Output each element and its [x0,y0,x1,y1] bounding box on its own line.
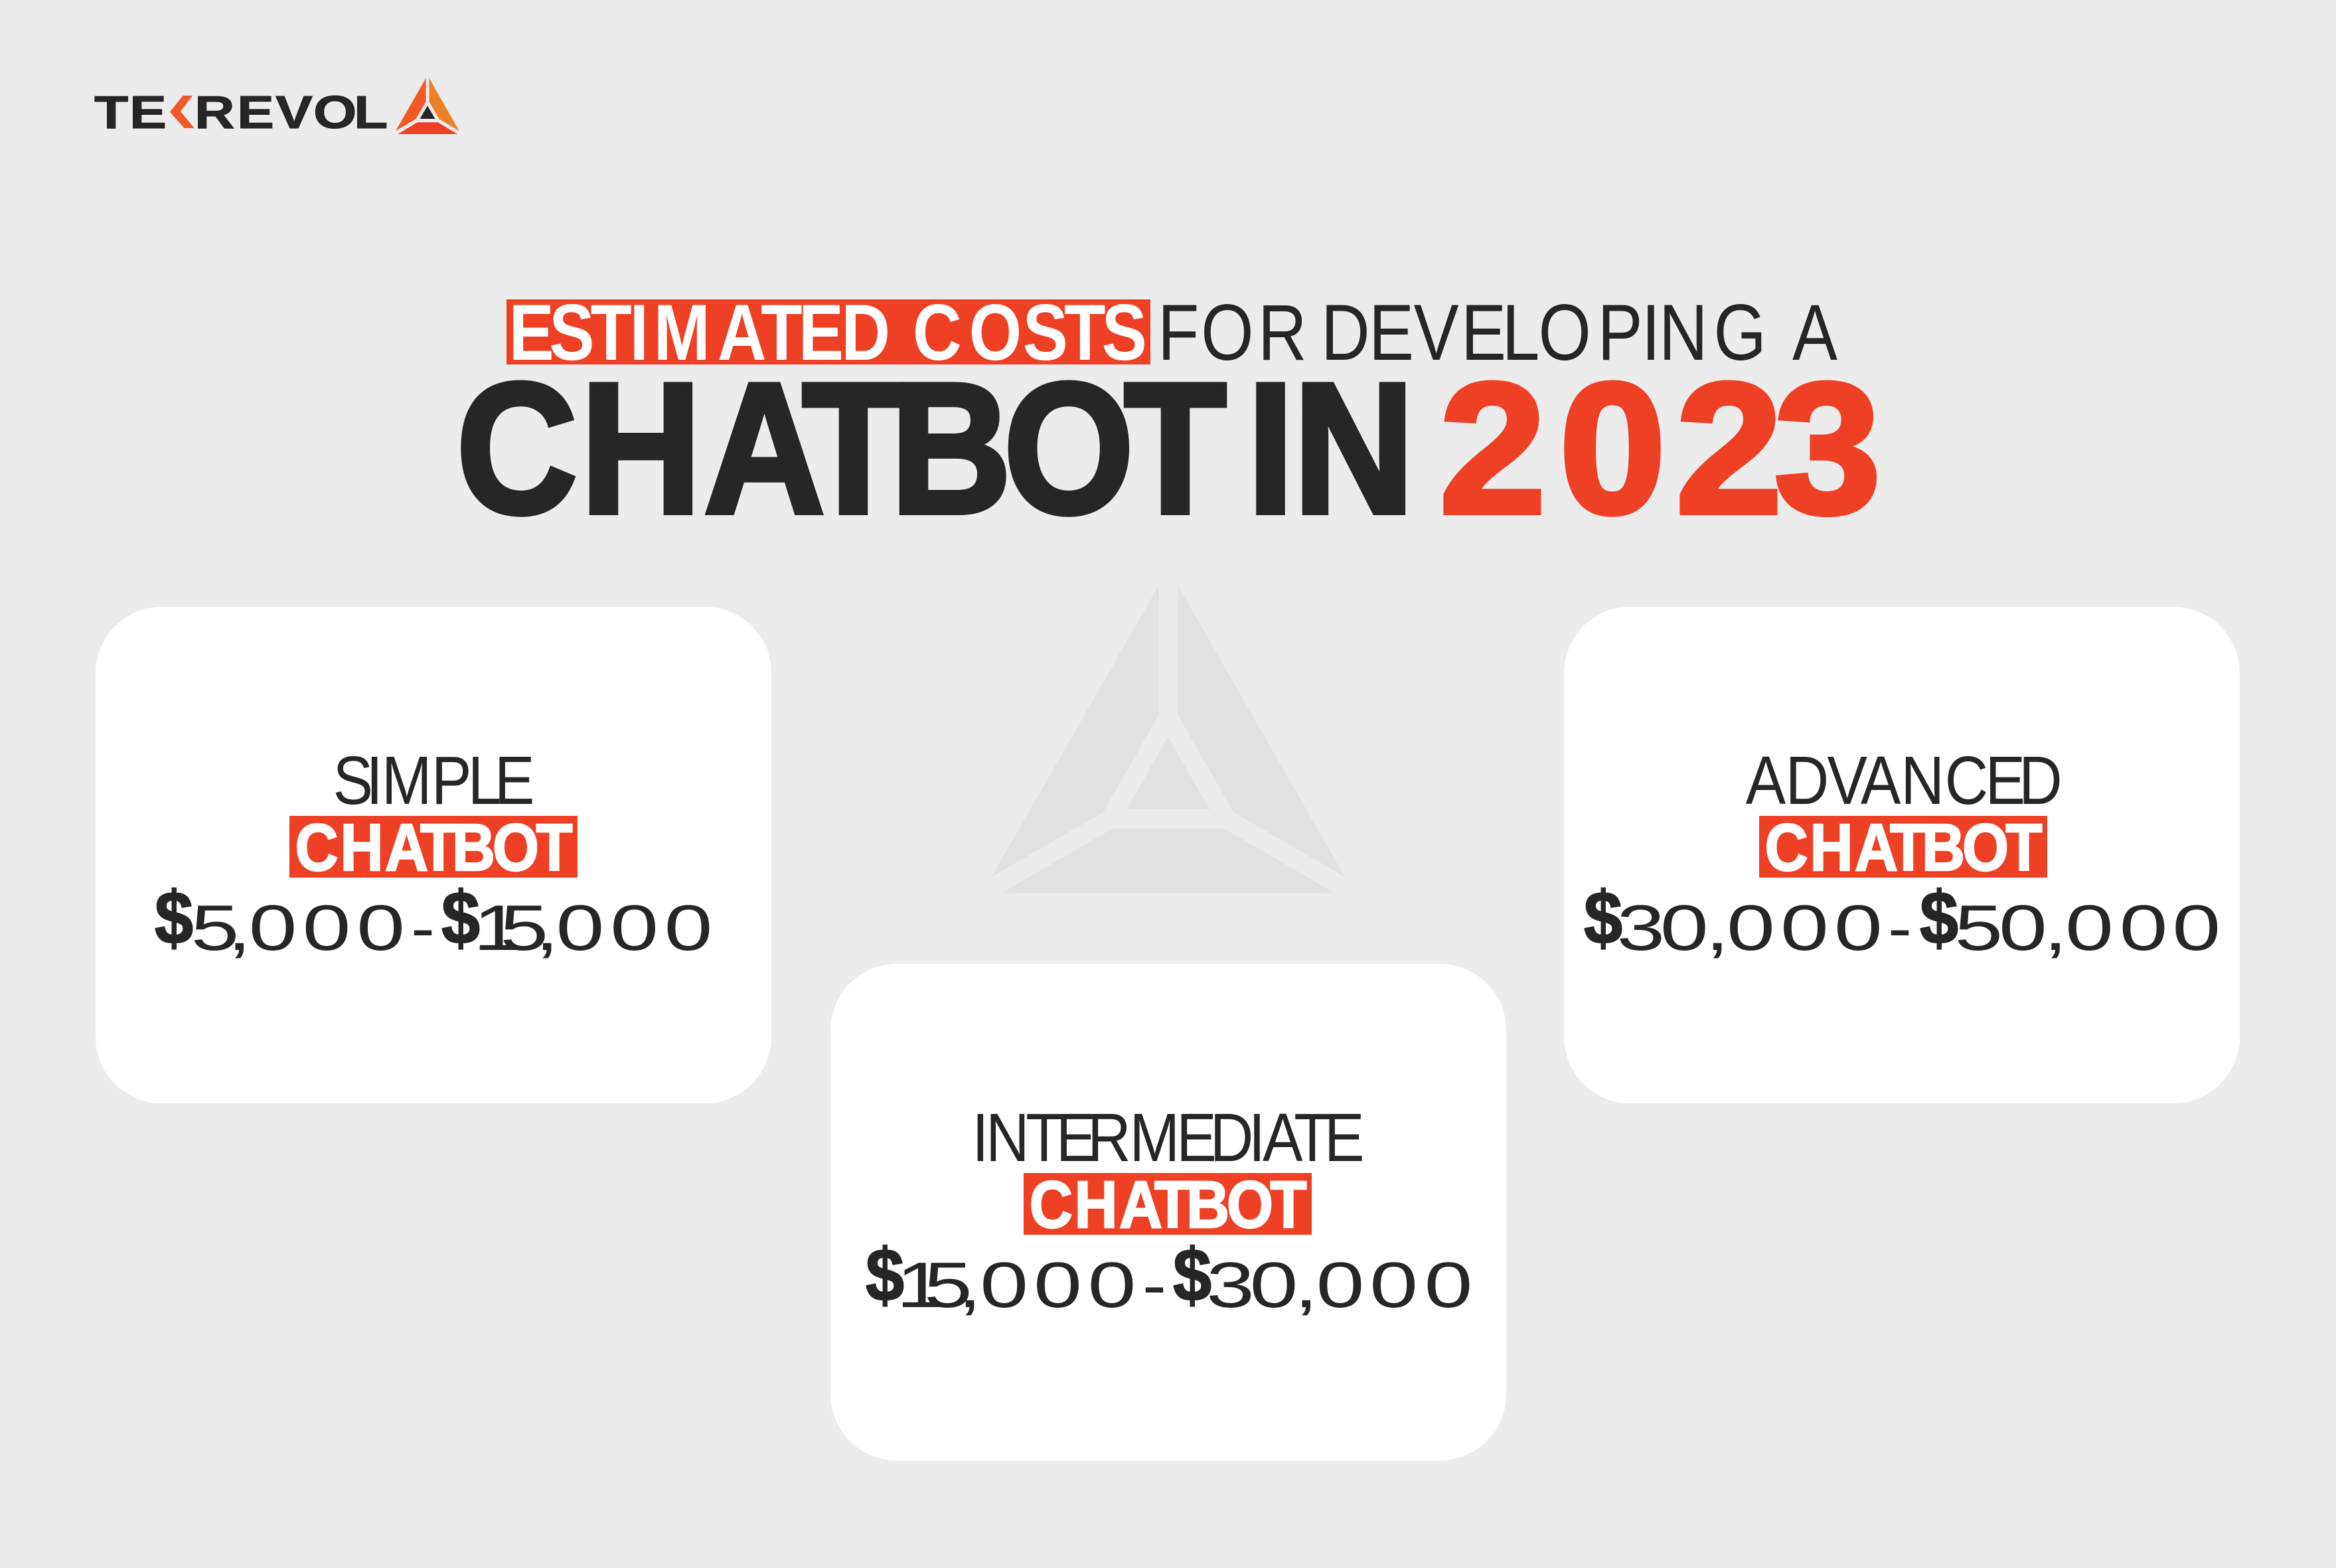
logo wordmark: REVOL [195,87,388,138]
logo triangle mark [396,78,459,134]
price range: - [1888,892,1912,964]
price range [866,1233,1472,1321]
title line two: CHATBOT IN [457,345,1414,552]
price range: 15,000 [473,892,712,964]
price range: - [411,892,435,964]
label: intermediate: INTERMEDIATE [972,1099,1364,1176]
logo wordmark [94,87,388,138]
title highlight: estimated costs: ESTIMATED COSTS [509,287,1147,377]
price range: $ [155,876,193,959]
card background [1564,607,2240,1103]
price range: 15,000 [896,1249,1136,1321]
badge: chatbot: CHATBOT [1030,1168,1306,1242]
price range [1584,876,2220,964]
price range: $ [1584,876,1622,959]
price range: $ [441,876,480,959]
card background [96,607,771,1103]
watermark triangle [992,586,1345,894]
panel: simple chatbot [96,607,771,1103]
title [457,287,1881,552]
title line two [457,345,1881,552]
badge: chatbot: CHATBOT [295,811,572,885]
price range: 50,000 [1954,892,2220,964]
logo wordmark: TE [94,87,167,138]
title line two: 2023 [1439,345,1881,552]
price range: $ [1920,876,1958,959]
logo: Tekrevol [94,78,459,138]
card background [830,964,1506,1460]
panel: advanced chatbot [1564,607,2240,1103]
title line one remainder: FOR DEVELOPING A [1158,287,1838,377]
price range [155,876,712,964]
price range: $ [866,1233,904,1316]
price range: $ [1173,1233,1211,1316]
label: simple: SIMPLE [333,742,534,819]
price range: - [1142,1249,1166,1321]
price range: 5,000 [191,892,405,964]
badge: chatbot: CHATBOT [1765,811,2042,885]
price range: 30,000 [1616,892,1883,964]
price range: 30,000 [1206,1249,1472,1321]
label: advanced: ADVANCED [1746,742,2063,819]
panel: intermediate chatbot [830,964,1506,1460]
